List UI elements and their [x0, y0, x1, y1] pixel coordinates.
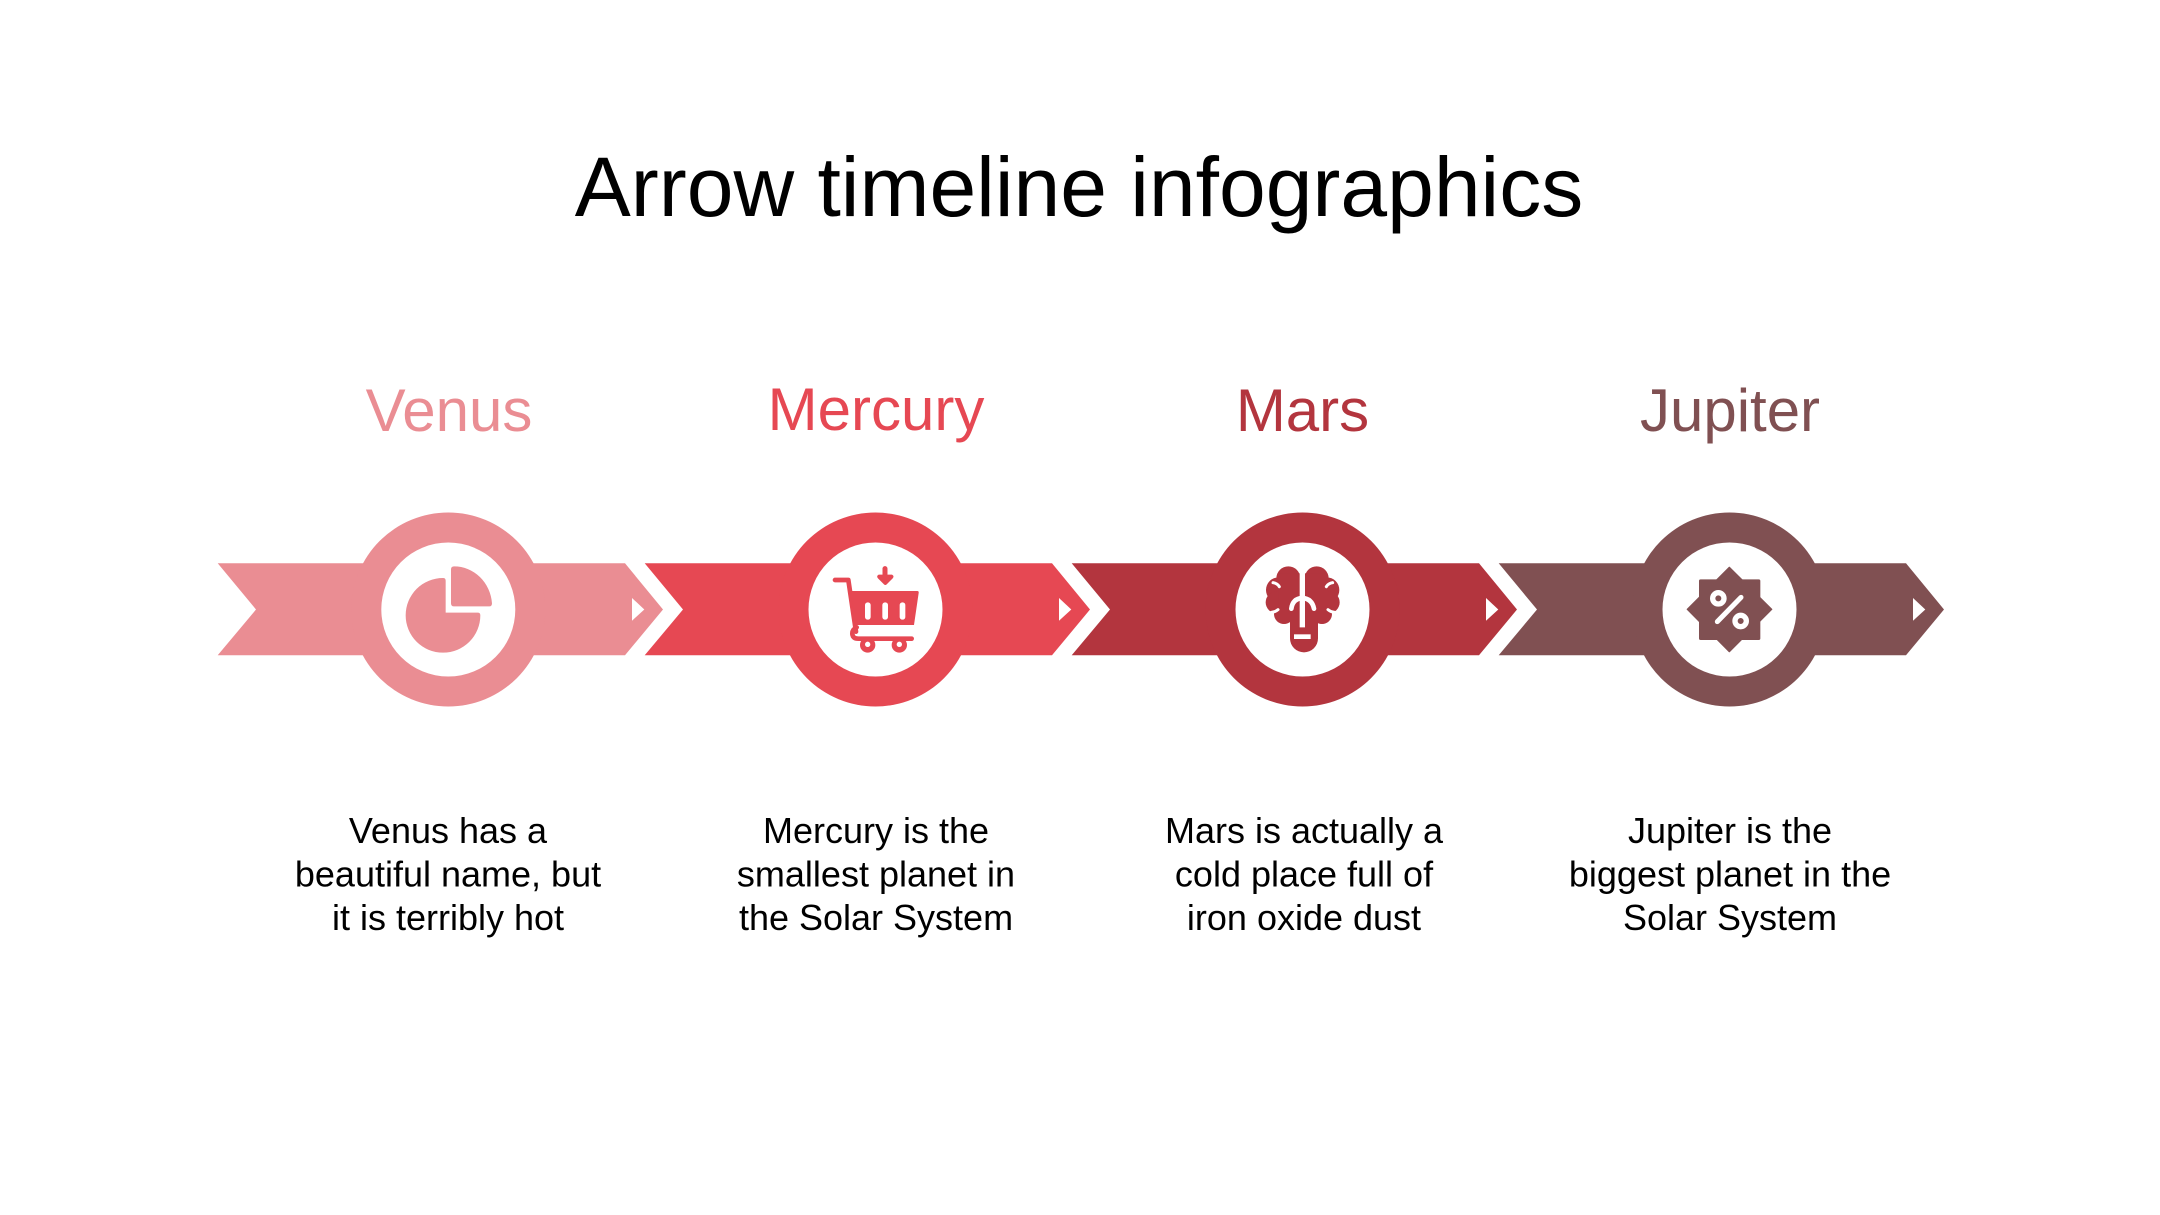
icon: brain with light bulb	[1266, 566, 1340, 652]
arrow band: Venus	[218, 563, 663, 655]
ring badge	[1632, 512, 1826, 706]
panel: Mercury	[645, 376, 1090, 938]
description: Venus: beautiful name, but	[295, 853, 601, 894]
description: Jupiter: biggest planet in the	[1569, 853, 1891, 894]
heading: Mars: Mars	[1236, 377, 1369, 444]
description: Mercury: Mercury is the	[763, 810, 989, 851]
badge inner circle	[808, 542, 942, 676]
small arrow marker	[1059, 598, 1071, 621]
badge inner circle	[381, 542, 515, 676]
panel: Venus	[218, 377, 663, 938]
heading: Mercury: Mercury	[768, 376, 984, 443]
description: Mercury: smallest planet in	[737, 853, 1015, 894]
description: Venus: Venus has a	[349, 810, 548, 851]
title: Arrow timeline infographics	[575, 140, 1583, 234]
icon: shopping cart	[835, 569, 919, 653]
heading: Jupiter: Jupiter	[1640, 377, 1820, 444]
small arrow marker	[632, 598, 644, 621]
badge inner circle	[1662, 542, 1796, 676]
small arrow marker	[1486, 598, 1498, 621]
ring badge	[778, 512, 972, 706]
description: Mars: iron oxide dust	[1187, 897, 1421, 938]
ring badge	[351, 512, 545, 706]
arrow band: Mars	[1072, 563, 1517, 655]
description: Jupiter: Jupiter is the	[1628, 810, 1832, 851]
ring badge	[1206, 512, 1400, 706]
arrow band: Mercury	[645, 563, 1090, 655]
description: Venus: it is terribly hot	[332, 897, 564, 938]
description: Jupiter: Solar System	[1623, 897, 1837, 938]
panel: Jupiter	[1499, 377, 1944, 938]
description: Mars: cold place full of	[1175, 853, 1434, 894]
description: Mercury: the Solar System	[739, 897, 1013, 938]
badge inner circle	[1236, 542, 1370, 676]
icon: percent badge	[1687, 567, 1772, 652]
arrow band: Jupiter	[1499, 563, 1944, 655]
description: Mars: Mars is actually a	[1165, 810, 1444, 851]
heading: Venus: Venus	[366, 377, 532, 444]
icon: pie chart	[406, 566, 492, 653]
small arrow marker	[1913, 598, 1925, 621]
panel: Mars	[1072, 377, 1517, 938]
